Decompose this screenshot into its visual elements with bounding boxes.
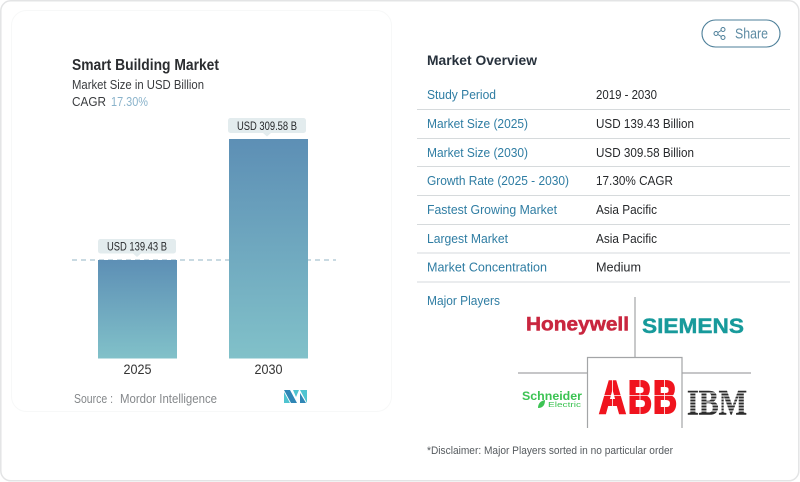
source note: Source : — [74, 392, 113, 406]
logo: schneider electric — [522, 391, 583, 409]
dashed reference line — [72, 259, 336, 261]
icon: mordor intelligence logo — [284, 390, 307, 403]
logo: siemens: SIEMENS — [642, 315, 744, 338]
bar: 2025 — [98, 239, 177, 358]
logo: honeywell: Honeywell — [526, 314, 629, 336]
heading: market overview: Market Overview — [427, 52, 537, 68]
cagr value: 17.30% — [111, 94, 148, 109]
logo: schneider electric: Electric — [548, 402, 582, 409]
panel: chart — [12, 10, 392, 412]
row: market concentration: Market Concentration — [427, 260, 547, 274]
row: market size 2025: Market Size (2025) — [427, 116, 528, 131]
disclaimer: *Disclaimer: Major Players sorted in no particular order — [427, 445, 673, 457]
row: study period — [427, 87, 657, 102]
value label: 2025: USD 139.43 B — [107, 240, 167, 254]
row: market size 2025: USD 139.43 Billion — [596, 116, 694, 131]
source note: Mordor Intelligence — [120, 392, 217, 406]
value label: 2030: USD 309.58 B — [237, 119, 297, 133]
logo: abb: B — [653, 371, 677, 423]
row: growth rate: 17.30% CAGR — [596, 173, 673, 188]
row: market size 2030: Market Size (2030) — [427, 145, 528, 160]
year label: 2025: 2025 — [124, 362, 152, 377]
logo: abb: B — [628, 371, 652, 423]
row: largest market: Asia Pacific — [596, 231, 657, 246]
year label: 2030: 2030 — [254, 362, 282, 377]
major players logo grid — [518, 297, 751, 428]
cagr value: CAGR — [72, 94, 106, 109]
row: largest market — [427, 231, 657, 246]
logo: ibm: IBM — [687, 382, 747, 422]
row: study period: Study Period — [427, 87, 496, 102]
share button: Share — [735, 26, 768, 42]
row: market size 2030: USD 309.58 Billion — [596, 145, 694, 160]
chart title: Smart Building Market — [72, 57, 219, 74]
share button — [702, 20, 780, 47]
bar: 2030 — [228, 118, 308, 358]
row: fastest growing market — [427, 202, 657, 217]
value label: 2030 — [228, 118, 306, 136]
row: largest market: Largest Market — [427, 231, 508, 246]
logo: abb — [596, 371, 678, 423]
source note — [74, 392, 217, 406]
table: market overview — [417, 87, 790, 282]
heading: major players: Major Players — [427, 293, 500, 308]
row: market size 2025 — [427, 116, 694, 131]
row: study period: 2019 - 2030 — [596, 87, 657, 102]
row: market size 2030 — [427, 145, 694, 160]
chart subtitle: Market Size in USD Billion — [72, 77, 204, 92]
logo: schneider electric: Schneider — [522, 391, 583, 403]
row: fastest growing market: Asia Pacific — [596, 202, 657, 217]
row: growth rate — [427, 173, 673, 188]
row: growth rate: Growth Rate (2025 - 2030) — [427, 173, 569, 188]
logo: abb: A — [599, 371, 626, 423]
row: fastest growing market: Fastest Growing Market — [427, 202, 557, 217]
icon: share — [714, 28, 725, 40]
row: market concentration: Medium — [596, 260, 641, 274]
row: market concentration — [427, 260, 641, 274]
cagr value — [72, 94, 148, 109]
